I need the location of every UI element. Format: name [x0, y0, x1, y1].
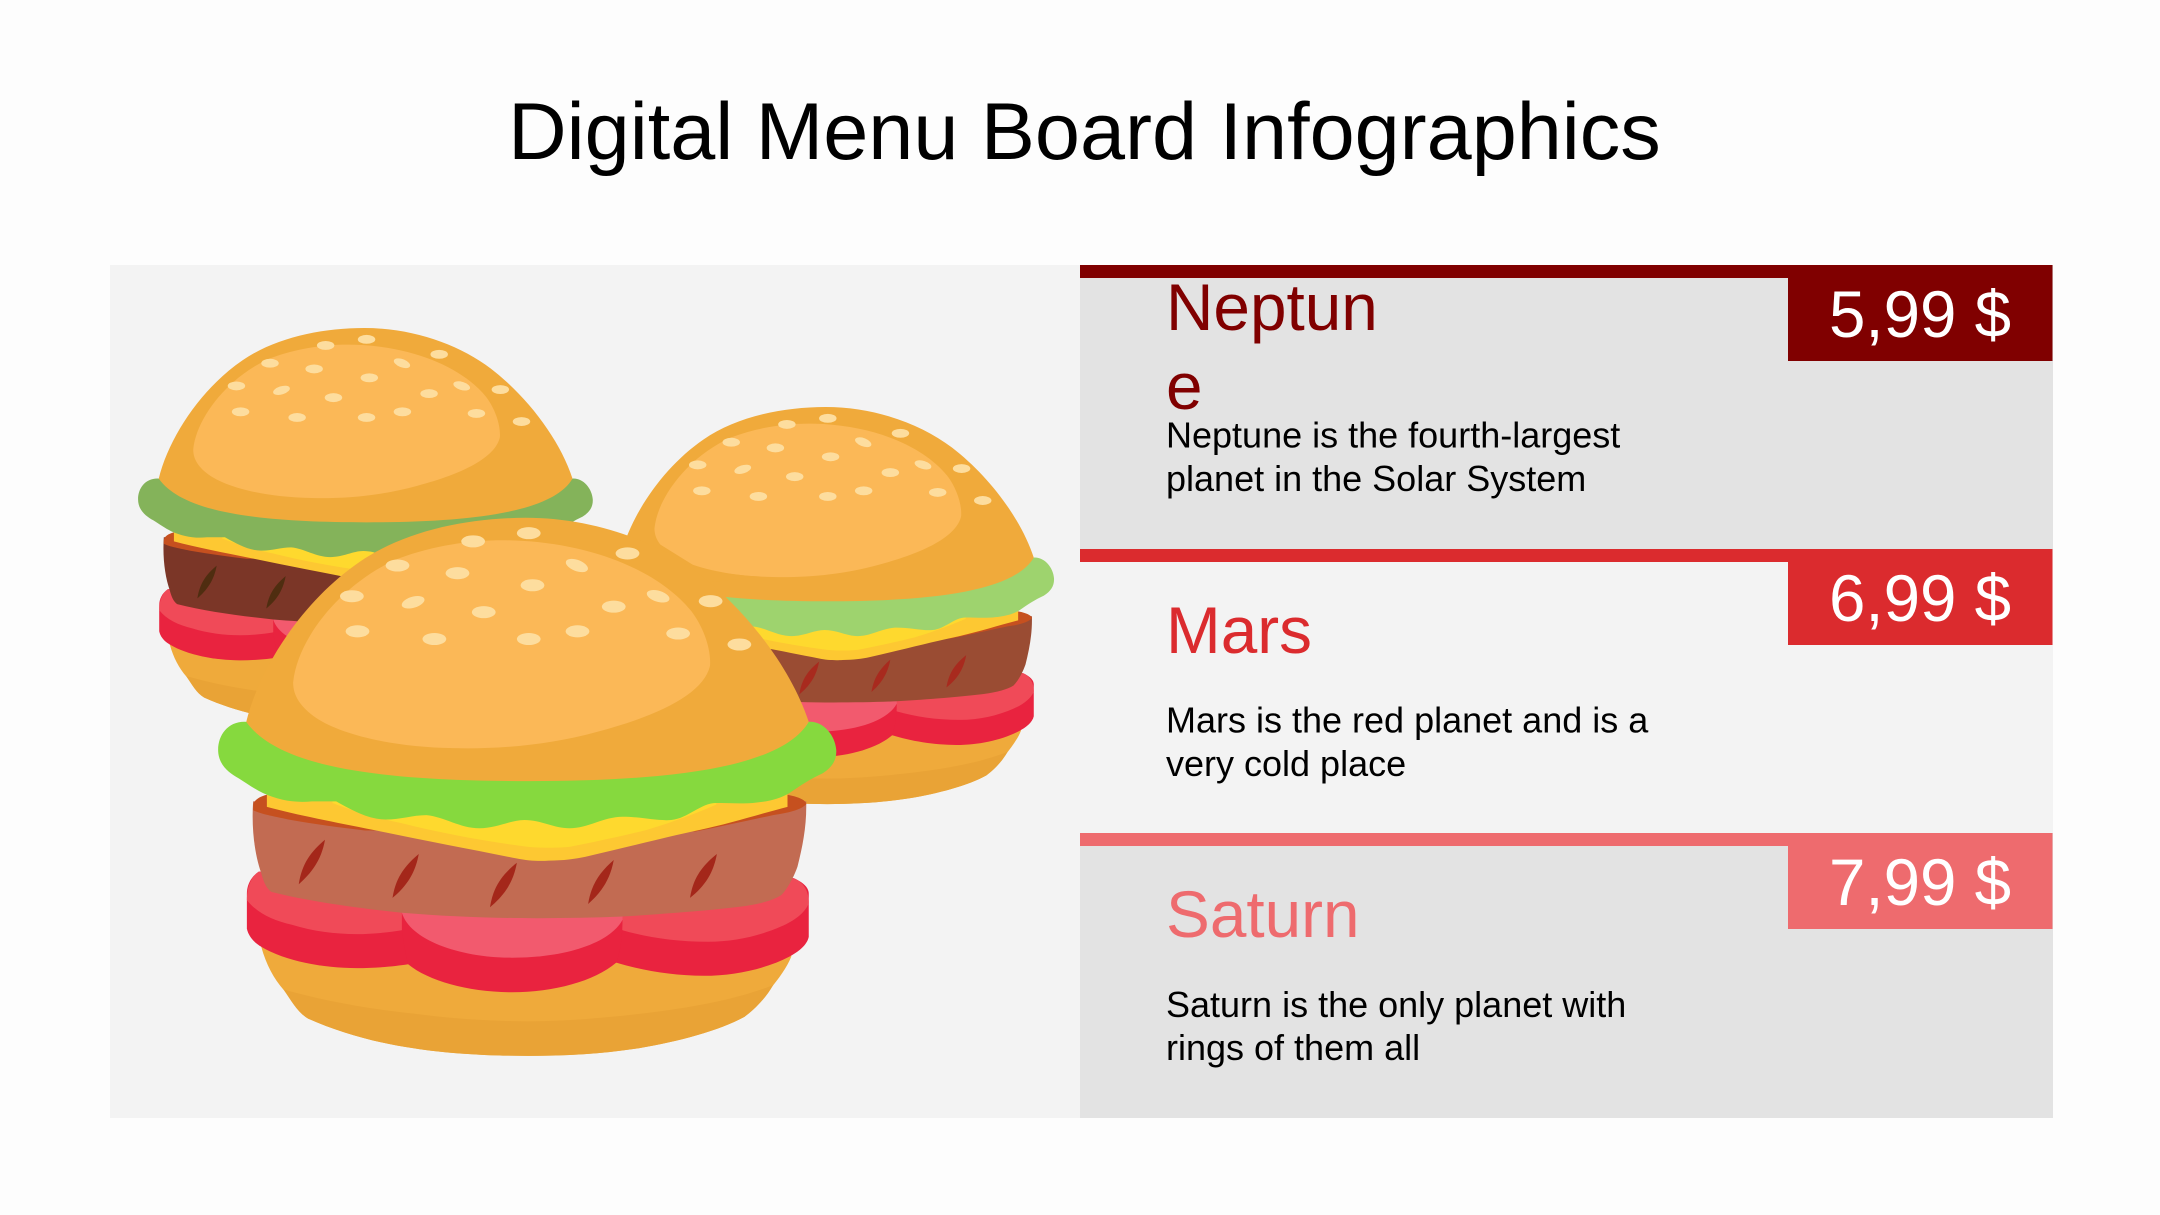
description: Neptune: Neptune is the fourth-largest — [1166, 414, 1620, 456]
description: Neptune: planet in the Solar System — [1166, 458, 1586, 499]
description: Saturn: rings of them all — [1166, 1027, 1420, 1068]
heading: Neptune: Neptun — [1166, 271, 1378, 344]
price tag: Neptune: 5,99 $ — [1829, 278, 2011, 351]
title: Digital Menu Board Infographics — [508, 87, 1661, 177]
illustration: three burgers — [138, 328, 1054, 1056]
heading: Mars: Mars — [1166, 594, 1312, 667]
burger: back left — [138, 328, 593, 725]
panel: burger illustration — [110, 265, 1080, 1118]
price tag: Saturn — [1788, 833, 2052, 929]
description: Saturn: Saturn is the only planet with — [1166, 984, 1626, 1025]
price tag: Saturn: 7,99 $ — [1829, 846, 2011, 919]
description: Mars: Mars is the red planet and is a — [1166, 700, 1649, 740]
price tag: Mars: 6,99 $ — [1829, 562, 2011, 635]
price tag: Neptune — [1788, 265, 2052, 361]
burger: back right — [599, 407, 1054, 804]
panel: Saturn — [1080, 833, 2053, 1118]
description: Mars: very cold place — [1166, 743, 1406, 784]
heading: Saturn: Saturn — [1166, 878, 1360, 951]
panel: Mars — [1080, 549, 2053, 833]
price tag: Mars — [1788, 549, 2052, 645]
panel: Neptune — [1080, 265, 2053, 549]
burger: front — [218, 518, 836, 1056]
heading: Neptune: e — [1166, 350, 1203, 423]
